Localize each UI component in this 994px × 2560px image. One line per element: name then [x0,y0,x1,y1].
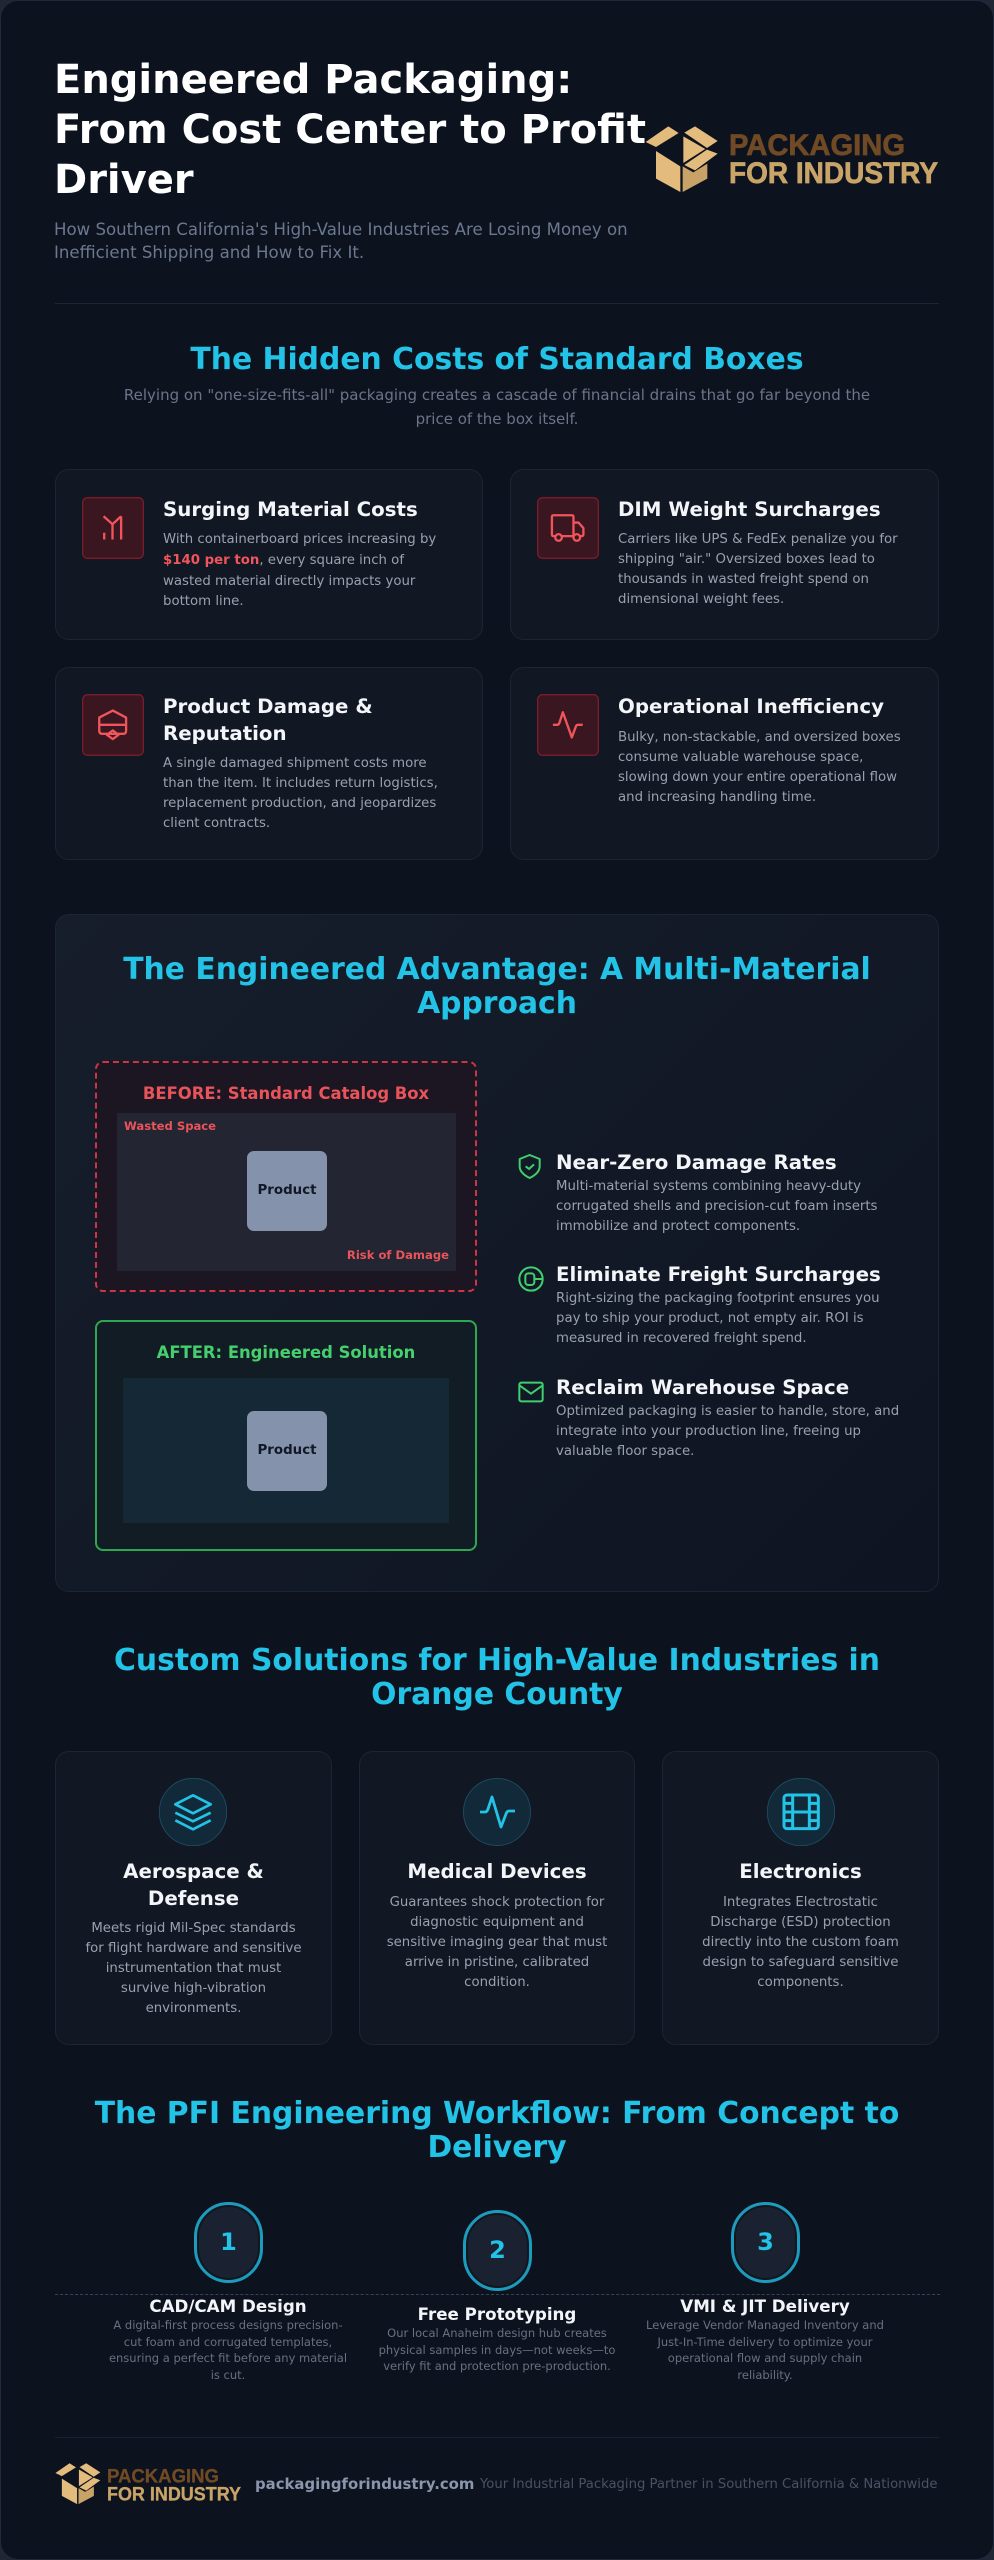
heading: engineered advantage: Approach [417,986,577,1021]
panel: engineered advantage [55,914,939,1592]
text: freight surcharges: Right-sizing the packaging footprint ensures you [556,1291,880,1306]
title [54,57,646,203]
step text 3: Just-In-Time delivery to optimize your [657,2334,872,2348]
icon: layers [159,1778,227,1846]
text: surging material costs: wasted material directly impacts your [163,574,415,589]
logo: Packaging For Industry: PACKAGING [729,129,905,162]
panel: product damage [55,667,483,860]
text: surging material costs: bottom line. [163,594,244,609]
text: freight surcharges [556,1291,880,1346]
heading: warehouse space: Reclaim Warehouse Space [556,1376,849,1399]
footer logo [56,2463,241,2505]
intro text: hidden costs: Relying on "one-size-fits-all" packaging creates a cascade of financial drains that go far beyond the [124,386,870,404]
text: aerospace: instrumentation that must [106,1961,281,1976]
heading: custom solutions: Custom Solutions for High-Value Industries in [114,1643,880,1678]
heading: engineered advantage: The Engineered Advantage: A Multi-Material [123,952,871,987]
step 1 [109,2202,347,2382]
icon: shield [518,1154,541,1179]
text: medical devices: sensitive imaging gear that must [387,1935,607,1950]
footer tagline: Your Industrial Packaging Partner in Southern California & Nationwide [480,2477,937,2492]
icon: material costs [82,497,144,559]
step heading 2: Free Prototyping [418,2304,576,2324]
text: medical devices: Guarantees shock protection for [390,1895,604,1910]
text: surging material costs [163,532,436,609]
text: electronics: design to safeguard sensitive [703,1955,898,1970]
product: Product [257,1443,317,1458]
heading: custom solutions: Orange County [371,1677,623,1712]
step text 3: operational flow and supply chain [668,2351,862,2365]
text: operational inefficiency: and increasing handling time. [618,790,816,805]
heading: workflow [94,2096,899,2165]
text: electronics [702,1895,899,1990]
before: inner box [117,1113,456,1271]
step text 1: A digital-first process designs precision- [113,2318,343,2332]
heading: freight surcharges: Eliminate Freight Surcharges [556,1263,881,1286]
text: near-zero damage: immobilize and protect components. [556,1219,800,1234]
text: aerospace: Meets rigid Mil-Spec standards [91,1921,296,1936]
intro text: hidden costs: price of the box itself. [416,410,578,428]
text: surging material costs: $140 per ton, every square inch of [163,553,404,568]
text: product damage [163,756,438,831]
text: operational inefficiency: Bulky, non-stackable, and oversized boxes [618,730,901,745]
icon: pulse [537,694,599,756]
text: product damage: client contracts. [163,816,270,831]
intro text: hidden costs [124,386,870,428]
heading: surging material costs: Surging Material Costs [163,498,418,521]
text: near-zero damage: Multi-material systems combining heavy-duty [556,1179,861,1194]
benefit: near-zero damage [518,1151,878,1234]
step number 1 [194,2202,263,2283]
heading: electronics: Electronics [739,1860,862,1883]
panel: operational inefficiency [510,667,939,860]
step number 1: 1 [220,2228,237,2256]
icon: envelope [518,1382,544,1402]
text: product damage: than the item. It includes return logistics, [163,776,438,791]
heading: workflow: The PFI Engineering Workflow: From Concept to [95,2096,899,2131]
title: From Cost Center to Profit [54,107,646,153]
title: Driver [54,157,194,203]
after: inner foam [123,1378,449,1523]
icon: pulse [463,1778,531,1846]
text: electronics: Discharge (ESD) protection [710,1915,891,1930]
text: DIM weight: shipping "air." Oversized boxes lead to [618,552,875,567]
text: operational inefficiency: consume valuable warehouse space, [618,750,863,765]
label: wasted space: Wasted Space [124,1119,216,1133]
heading: product damage [163,695,373,745]
heading: aerospace: Defense [148,1887,239,1910]
heading: aerospace [123,1860,264,1910]
text: operational inefficiency: slowing down your entire operational flow [618,770,897,785]
footer website: packagingforindustry.com [255,2475,474,2493]
icon: truck [537,497,599,559]
text: aerospace: for flight hardware and sensitive [85,1941,302,1956]
text: near-zero damage [556,1179,878,1234]
title: Engineered Packaging: [54,57,572,103]
step text 3 [646,2318,884,2382]
step text 1 [109,2318,347,2382]
text: medical devices: condition. [464,1975,530,1990]
text: aerospace: survive high-vibration [121,1981,266,1996]
step text 2: verify fit and protection pre-production. [383,2359,611,2373]
text: near-zero damage: corrugated shells and precision-cut foam inserts [556,1199,878,1214]
label: before: BEFORE: Standard Catalog Box [143,1084,429,1103]
step text 3: reliability. [737,2368,793,2382]
logo: Packaging For Industry [646,126,938,192]
step 3 [646,2202,884,2382]
text: DIM weight: Carriers like UPS & FedEx penalize you for [618,532,898,547]
step text 1: is cut. [211,2368,245,2382]
step text 2 [379,2326,615,2373]
step number 3: 3 [757,2228,774,2256]
text: DIM weight: thousands in wasted freight spend on [618,572,869,587]
panel: medical devices [359,1751,635,2045]
heading: product damage: Reputation [163,722,287,745]
text: medical devices: arrive in pristine, calibrated [405,1955,589,1970]
panel: electronics [662,1751,939,2045]
step text 1: ensuring a perfect fit before any material [109,2351,347,2365]
text: product damage: replacement production, and jeopardizes [163,796,436,811]
step heading 3: VMI & JIT Delivery [680,2296,850,2316]
step text 3: Leverage Vendor Managed Inventory and [646,2318,884,2332]
text: medical devices: diagnostic equipment and [410,1915,584,1930]
icon: damaged box [82,694,144,756]
text: surging material costs: With containerboard prices increasing by [163,532,436,547]
label: after: AFTER: Engineered Solution [157,1343,415,1362]
text: warehouse space: valuable floor space. [556,1444,694,1459]
icon: film [767,1778,835,1846]
step heading 1: CAD/CAM Design [149,2296,307,2316]
product [247,1411,327,1491]
heading: workflow: Delivery [427,2130,567,2165]
heading: custom solutions [114,1643,880,1712]
text: product damage: A single damaged shipment costs more [163,756,427,771]
benefit: warehouse space [518,1376,899,1459]
icon: cycle [518,1266,544,1292]
heading: medical devices: Medical Devices [407,1860,587,1883]
text: electronics: directly into the custom foam [702,1935,899,1950]
heading: DIM weight: DIM Weight Surcharges [618,498,881,521]
benefit: freight surcharges [518,1263,881,1346]
subtitle: Inefficient Shipping and How to Fix It. [54,243,364,262]
heading: operational inefficiency: Operational Inefficiency [618,695,884,718]
panel: DIM weight surcharges [510,469,939,640]
step number 3 [731,2202,800,2283]
heading: near-zero damage: Near-Zero Damage Rates [556,1151,837,1174]
text: freight surcharges: measured in recovered freight spend. [556,1331,807,1346]
label: risk of damage: Risk of Damage [347,1248,449,1262]
text: DIM weight: dimensional weight fees. [618,592,784,607]
text: freight surcharges: pay to ship your product, not empty air. ROI is [556,1311,864,1326]
subtitle: How Southern California's High-Value Industries Are Losing Money on [54,220,628,239]
heading: product damage: Product Damage & [163,695,373,718]
text: warehouse space: integrate into your production line, freeing up [556,1424,861,1439]
step text 2: Our local Anaheim design hub creates [387,2326,607,2340]
text: electronics: Integrates Electrostatic [723,1895,878,1910]
text: medical devices [387,1895,607,1990]
before box [95,1061,477,1292]
text: electronics: components. [757,1975,844,1990]
step number 2: 2 [489,2236,506,2264]
heading: aerospace: Aerospace & [123,1860,264,1883]
product [247,1151,327,1231]
subtitle [54,220,628,262]
step 2 [379,2210,615,2373]
text: warehouse space: Optimized packaging is easier to handle, store, and [556,1404,899,1419]
text: aerospace: environments. [146,2001,241,2016]
step text 2: physical samples in days—not weeks—to [379,2342,615,2356]
panel: surging material costs [55,469,483,640]
heading: hidden costs: The Hidden Costs of Standard Boxes [190,342,804,377]
panel: aerospace [55,1751,332,2045]
heading: engineered advantage [123,952,871,1021]
footer logo: PACKAGING [107,2466,219,2488]
text: DIM weight [618,532,898,607]
product: Product [257,1183,317,1198]
text: warehouse space [556,1404,899,1459]
after box [95,1320,477,1551]
step number 2 [463,2210,532,2291]
text: operational inefficiency [618,730,901,805]
text: aerospace [85,1921,302,2016]
step text 1: cut foam and corrugated templates, [124,2334,332,2348]
